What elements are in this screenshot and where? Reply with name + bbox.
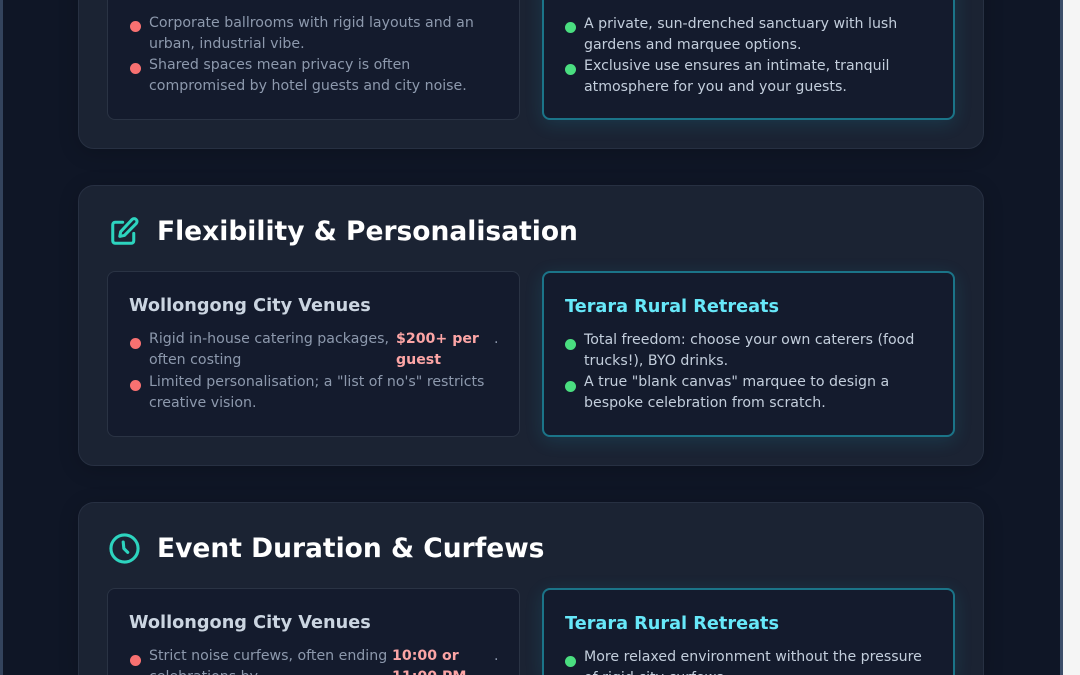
bullet	[130, 21, 141, 32]
bullet	[130, 655, 141, 666]
text: noise curfews	[149, 648, 387, 675]
text: city atmosphere point one: Corporate ballrooms with rigid layouts and an	[149, 15, 474, 31]
card: Terara flexibility	[542, 271, 955, 437]
panel: flexibility and personalisation	[78, 185, 984, 466]
icon: pencil in square	[111, 217, 138, 245]
text: city atmosphere point two	[149, 57, 467, 94]
bullet	[565, 64, 576, 75]
text: rural atmosphere point two: atmosphere for you and your guests.	[584, 79, 847, 95]
bullet	[130, 338, 141, 349]
icon: clock	[109, 533, 140, 564]
text: limited personalisation	[149, 374, 484, 411]
bullet	[565, 339, 576, 350]
card: Wollongong curfews	[107, 588, 520, 675]
card: Terara curfews	[542, 588, 955, 675]
text: city atmosphere point two: compromised by hotel guests and city noise.	[149, 78, 467, 94]
panel: event duration and curfews	[78, 502, 984, 675]
card heading: Terara Rural Retreats	[565, 297, 779, 317]
text: total freedom	[584, 332, 914, 369]
bullet	[565, 22, 576, 33]
panel: venue atmosphere (continued from above)	[78, 0, 984, 149]
text: total freedom: trucks!), BYO drinks.	[584, 353, 728, 369]
highlight: price	[396, 331, 479, 368]
text: total freedom: Total freedom: choose your own caterers (food	[584, 332, 914, 348]
card heading: Wollongong City Venues	[129, 296, 371, 316]
card: Terara atmosphere	[542, 0, 955, 120]
bullet	[130, 63, 141, 74]
card: Wollongong atmosphere	[107, 0, 520, 120]
text: catering packages: often costing	[149, 352, 241, 368]
text: city atmosphere point one: urban, industrial vibe.	[149, 36, 305, 52]
text: blank canvas: A true "blank canvas" marquee to design a	[584, 374, 889, 390]
text: rural atmosphere point two: Exclusive use ensures an intimate, tranquil	[584, 58, 889, 74]
text: limited personalisation: Limited personalisation; a "list of no's" restricts	[149, 374, 484, 390]
text: catering packages: Rigid in-house catering packages,	[149, 331, 389, 347]
highlight: curfew time	[392, 648, 466, 675]
bullet	[130, 380, 141, 391]
text: relaxed environment	[584, 649, 922, 675]
text: rural atmosphere point one: A private, sun-drenched sanctuary with lush	[584, 16, 897, 32]
text: catering packages	[149, 331, 389, 368]
text: blank canvas: bespoke celebration from scratch.	[584, 395, 826, 411]
card heading: Wollongong City Venues	[129, 613, 371, 633]
text: limited personalisation: creative vision.	[149, 395, 256, 411]
text: rural atmosphere point two	[584, 58, 889, 95]
text: city atmosphere point two: Shared spaces mean privacy is often	[149, 57, 410, 73]
text: rural atmosphere point one: gardens and marquee options.	[584, 37, 801, 53]
text: noise curfews: Strict noise curfews, often ending	[149, 648, 387, 664]
text: full stop: .	[494, 648, 498, 664]
bullet	[565, 381, 576, 392]
text: relaxed environment: More relaxed environment without the pressure	[584, 649, 922, 665]
text: city atmosphere point one	[149, 15, 474, 52]
highlight: price: guest	[396, 352, 441, 368]
card heading: Terara Rural Retreats	[565, 614, 779, 634]
heading: event duration: Event Duration & Curfews	[157, 533, 544, 564]
text: rural atmosphere point one	[584, 16, 897, 53]
text: blank canvas	[584, 374, 889, 411]
text: full stop: .	[494, 331, 498, 347]
highlight: curfew time: 10:00 or	[392, 648, 459, 664]
highlight: price: $200+ per	[396, 331, 479, 347]
heading: flexibility: Flexibility & Personalisation	[157, 216, 578, 247]
bullet	[565, 656, 576, 667]
card: Wollongong flexibility	[107, 271, 520, 437]
